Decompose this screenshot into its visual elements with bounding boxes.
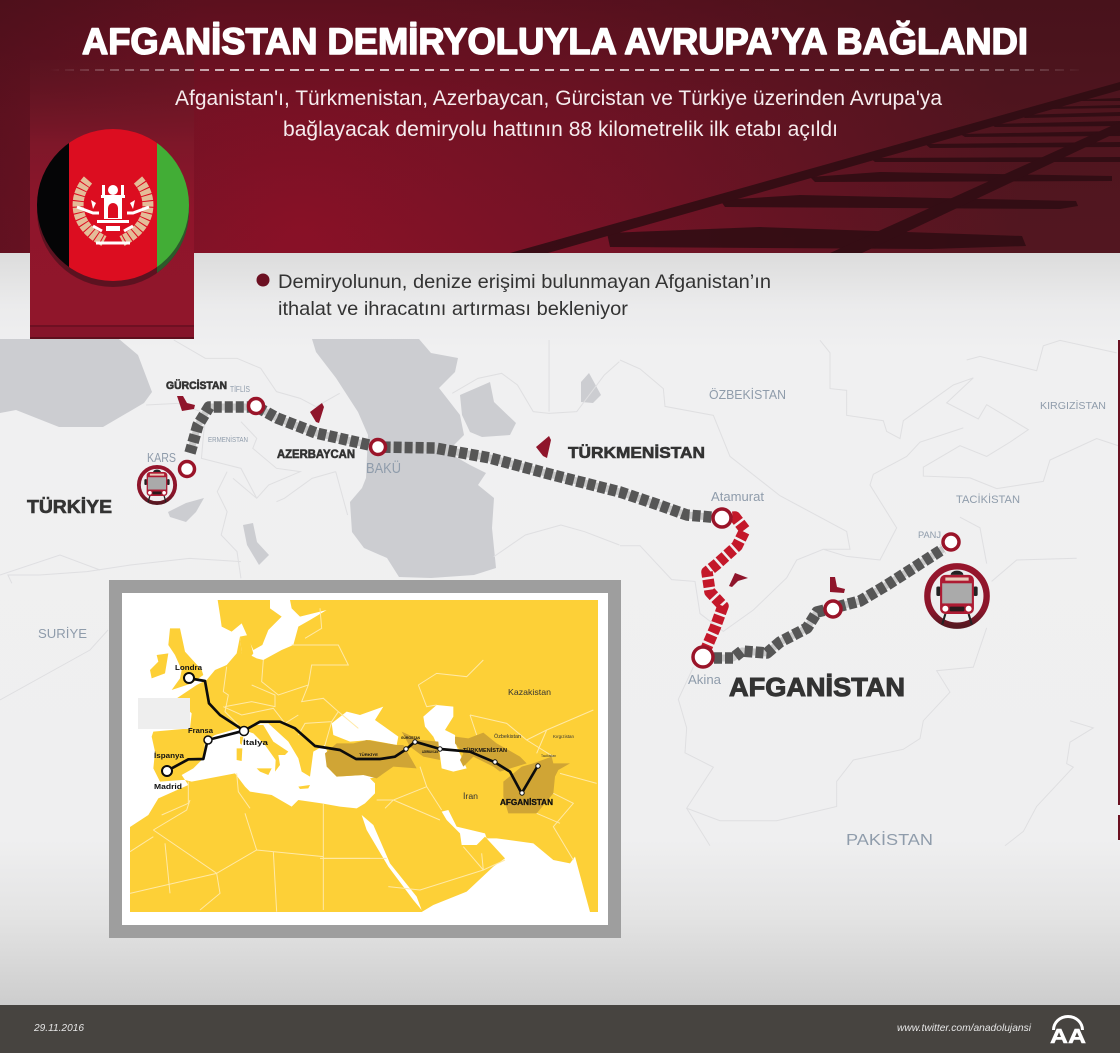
inset: labels: Özbekistan: [494, 733, 521, 740]
bullet note: Demiryolunun, denize erişimi bulunmayan Afganistan’ın: [278, 271, 771, 293]
map labels: TÜRKİYE: [27, 497, 112, 517]
inset: Atlantic, Baltic and Mediterranean: [130, 600, 377, 827]
map labels: AZERBAYCAN: [277, 447, 355, 461]
inset: route nodes: [162, 673, 540, 795]
icon: Anadolu Agency logo: AA: [1050, 1026, 1086, 1048]
right edge rule: [1118, 340, 1120, 840]
inset: borders: [130, 608, 597, 912]
page background: [0, 253, 1120, 1005]
inset: rail route: [167, 678, 538, 793]
inset: labels: TÜRKMENİSTAN: [463, 747, 507, 754]
subtitle: [175, 87, 942, 141]
map: country border lines: [0, 340, 1118, 846]
panel: flag banner: [30, 98, 194, 339]
inset: labels: GÜRCİSTAN: [401, 736, 420, 740]
route stations: [180, 398, 959, 667]
inset: labels: Fransa: [188, 726, 214, 735]
inset: labels: Tacikistan: [541, 754, 556, 758]
map labels: TACİKİSTAN: [956, 493, 1020, 506]
map labels: BAKÜ: [366, 459, 401, 477]
railway track photo in header: [510, 82, 1120, 253]
map labels: [27, 379, 1106, 849]
inset: labels: İtalya: [243, 738, 269, 747]
inset: labels: Kazakistan: [508, 687, 551, 697]
map labels: TÜRKMENİSTAN: [568, 443, 705, 462]
map labels: AFGANİSTAN: [729, 672, 905, 702]
map labels: ÖZBEKİSTAN: [709, 388, 786, 402]
bullet note: [256, 271, 771, 320]
map labels: SURİYE: [38, 626, 87, 641]
title: AFGANİSTAN DEMİRYOLUYLA AVRUPA’YA BAĞLANDI: [82, 20, 1028, 62]
Black Sea, Caspian, Red Sea, Gulf and Indian Ocean: [332, 707, 398, 745]
railway route on main map: [190, 407, 943, 658]
inset: labels: AZERBAYCAN: [422, 750, 438, 754]
map labels: GÜRCİSTAN: [166, 379, 227, 392]
inset: labels: Kırgızistan: [553, 734, 574, 739]
inset: highlighted countries on the route: [325, 732, 570, 813]
inset: labels: İran: [463, 792, 478, 801]
inset: labels: TÜRKİYE: [359, 752, 378, 757]
map labels: KARS: [147, 451, 176, 465]
header band: [0, 0, 1120, 253]
inset: labels: Londra: [175, 663, 203, 672]
panel: inset map Europe to Afghanistan: [109, 580, 621, 938]
icon: Afghan flag: [37, 129, 190, 287]
grey track: Akina to Panj: [703, 549, 943, 658]
inset: grey patch: [138, 698, 190, 729]
footer bar: [0, 1005, 1120, 1053]
inset: labels: [154, 663, 574, 807]
map labels: Atamurat: [711, 489, 764, 504]
map labels: PAKİSTAN: [846, 830, 933, 849]
inset: land islands and Italy: [150, 628, 380, 789]
map labels: ERMENİSTAN: [208, 435, 248, 444]
dashed rule under title: [50, 69, 1085, 71]
map labels: Akina: [688, 672, 722, 687]
red track: Atamurat to Akina: [703, 517, 745, 656]
icon: Anadolu Agency logo: [1050, 1015, 1086, 1048]
source link: www.twitter.com/anadolujansi: [897, 1022, 1032, 1034]
map labels: KIRGIZİSTAN: [1040, 399, 1106, 412]
map: grey seas and lakes of the region: [0, 339, 601, 578]
inset: labels: AFGANİSTAN: [500, 798, 553, 807]
subtitle: Afganistan'ı, Türkmenistan, Azerbaycan, Gürcistan ve Türkiye üzerinden Avrupa'ya: [175, 87, 942, 110]
country markers: [177, 396, 845, 593]
icon: train at Kars: [139, 467, 175, 503]
map labels: TİFLİS: [230, 385, 250, 394]
date: 29.11.2016: [33, 1022, 84, 1034]
bullet note: ithalat ve ihracatını artırması bekleniyor: [278, 298, 629, 320]
map labels: PANJ: [918, 530, 941, 540]
grey track: Kars to Atamurat: [190, 407, 722, 518]
icon: train at Panj: [927, 566, 987, 626]
inset: labels: Madrid: [154, 782, 182, 791]
inset: labels: İspanya: [154, 751, 185, 760]
subtitle: bağlayacak demiryolu hattının 88 kilometrelik ilk etabı açıldı: [283, 118, 838, 141]
